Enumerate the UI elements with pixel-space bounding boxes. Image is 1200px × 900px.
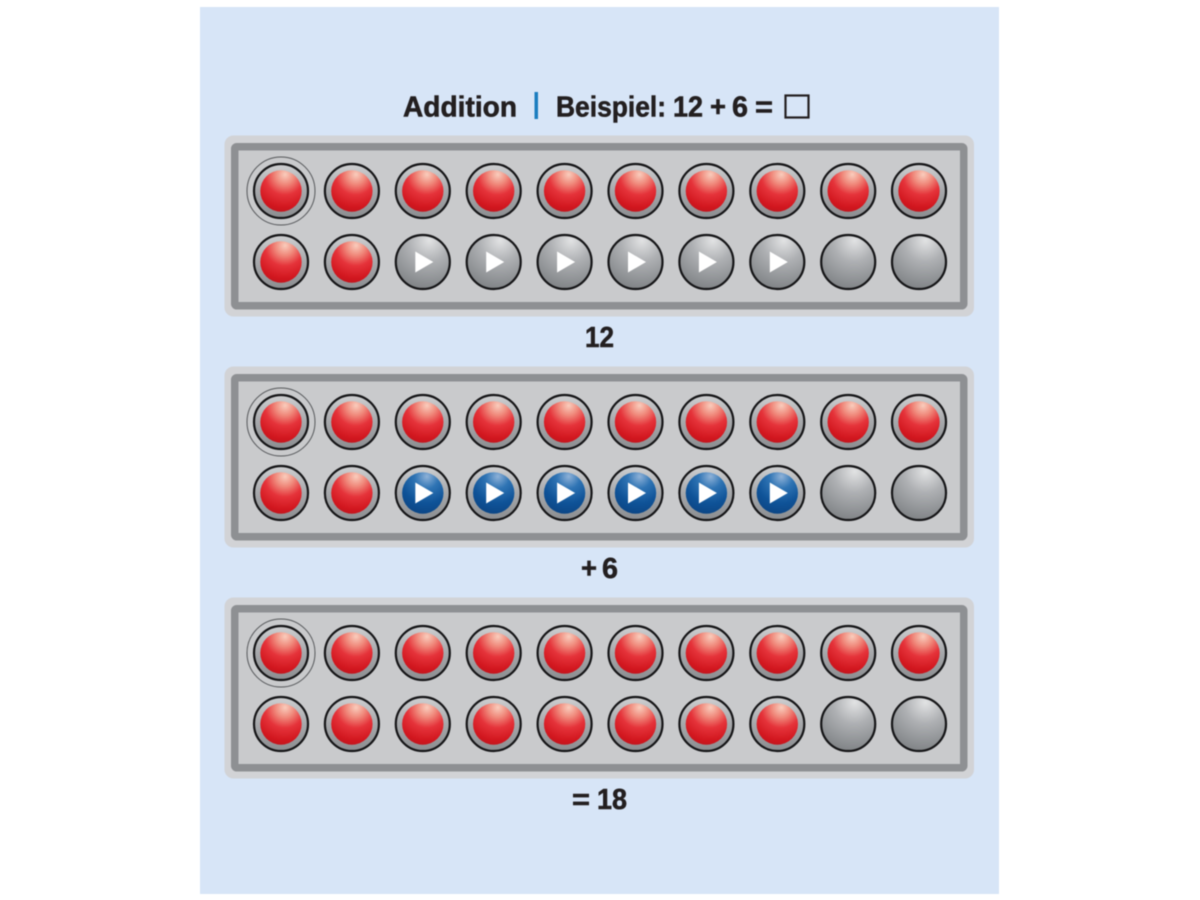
bottom row: 2 red, 6 gray arrow beads, 2 gray beads <box>254 235 946 289</box>
panel: 12 <box>224 136 974 316</box>
label: +6 <box>581 553 618 585</box>
bottom row: 2 red, 6 blue arrow beads, 2 gray beads <box>254 466 946 520</box>
panel: +6 <box>224 366 974 548</box>
label: =18 <box>572 784 627 816</box>
title: = <box>755 92 773 124</box>
ten-frame marker ring <box>247 388 315 456</box>
label: =18: = <box>572 784 590 816</box>
bottom row: 8 red beads, 2 gray beads <box>254 697 946 751</box>
title: Beispiel: <box>556 92 666 124</box>
top row: 10 red beads <box>254 164 946 218</box>
background panel <box>200 7 999 894</box>
title <box>403 92 808 124</box>
ten-frame marker ring <box>247 157 315 225</box>
label: +6: + <box>581 553 597 585</box>
ten-frame marker ring <box>247 619 315 687</box>
label: +6: 6 <box>602 553 618 585</box>
top row: 10 red beads <box>254 626 946 680</box>
top row: 10 red beads <box>254 395 946 449</box>
title: Addition <box>403 92 517 124</box>
label: =18: 18 <box>597 784 627 816</box>
title: + <box>710 92 726 124</box>
panel: 18 <box>224 598 974 778</box>
label: 12: 12 <box>585 322 614 354</box>
title: 12 <box>673 92 703 124</box>
title: 6 <box>732 92 748 124</box>
